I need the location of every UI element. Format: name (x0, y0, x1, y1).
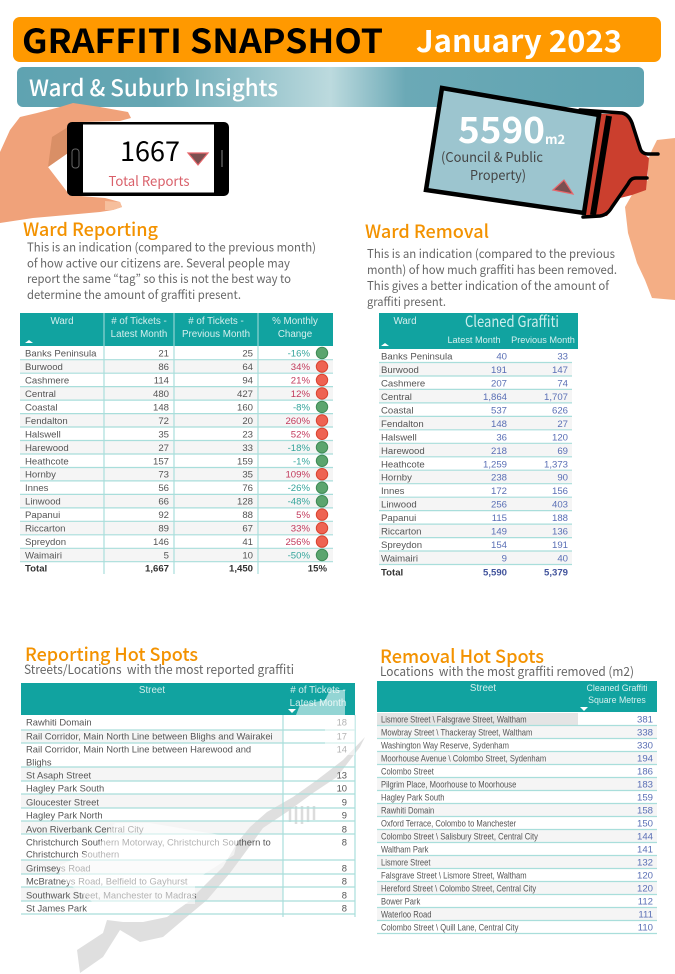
table rows: Central (25, 389, 56, 400)
table rows: Rail Corridor, Main North Line between Blighs and Wairakei (26, 730, 273, 742)
table header: # of Tickets - (111, 316, 167, 327)
icon: down triangle (188, 153, 208, 165)
text: ward reporting description: of how active our citizens are. Several people may (27, 254, 291, 272)
table rows: Burwood (381, 365, 419, 376)
map watermark (77, 737, 365, 973)
total reports value: 1667 (120, 130, 180, 169)
text: ward reporting description: This is an indication (compared to the previous month) (27, 238, 316, 256)
square metre values: 330 (637, 740, 653, 752)
total row (25, 564, 327, 574)
table rows: Waimairi (25, 550, 62, 562)
total reports label: Total Reports (108, 170, 190, 190)
square metre values: 381 (637, 714, 653, 726)
table header (377, 681, 657, 712)
table rows: 172 (491, 486, 507, 497)
table rows: -16% (288, 348, 310, 360)
total row: 5,590 (483, 568, 507, 578)
street names: Rawhiti Domain (381, 805, 434, 816)
table rows: Riccarton (381, 527, 422, 538)
title banner: January 2023 (416, 17, 622, 61)
table rows: Linwood (25, 497, 61, 508)
table rows: Papanui (381, 513, 416, 524)
table rows: 90 (557, 473, 568, 484)
table rows: Fendalton (25, 416, 68, 427)
table rows: 136 (552, 527, 568, 538)
table rows: 128 (237, 497, 253, 508)
table rows: 8 (342, 862, 347, 874)
table rows: 120 (552, 432, 568, 443)
square metre values: 194 (637, 754, 654, 764)
table header: Cleaned Graffiti (465, 310, 559, 332)
table header: Ward (393, 316, 417, 327)
total row: 1,667 (145, 564, 169, 574)
table rows: St Asaph Street (26, 770, 92, 780)
table header (379, 310, 578, 349)
table rows: 1,373 (544, 459, 568, 470)
table rows: Christchurch Southern (26, 848, 119, 860)
table rows: 25 (242, 348, 253, 360)
table rows: 160 (237, 402, 253, 413)
table rows: Coastal (381, 405, 414, 416)
table rows: 33% (291, 524, 310, 535)
table rows: Grimseys Road (26, 862, 91, 874)
removal unit: m2 (545, 129, 565, 148)
table rows: 27 (557, 419, 568, 430)
removal caption: Property) (470, 164, 526, 184)
table rows: 109% (285, 470, 310, 481)
table rows: Burwood (25, 362, 63, 373)
table rows (381, 352, 569, 564)
table rows: 207 (491, 378, 507, 390)
table rows: 114 (154, 376, 170, 386)
table rows: 89 (158, 524, 169, 535)
table rows: 56 (158, 483, 169, 494)
table rows (25, 347, 328, 562)
table rows: 94 (242, 376, 254, 386)
street names: Oxford Terrace, Colombo to Manchester (381, 818, 516, 829)
table rows (26, 716, 347, 914)
table rows: Hagley Park North (26, 810, 103, 820)
heading: Reporting Hot Spots: Reporting Hot Spots (25, 641, 198, 667)
table rows: 154 (491, 540, 508, 551)
icon: hand holding phone with total reports (0, 103, 229, 223)
table rows: 9 (502, 554, 507, 564)
table rows: 8 (342, 890, 347, 900)
square metre values: 186 (637, 766, 653, 778)
table rows: 115 (492, 513, 507, 524)
table rows: 33 (242, 443, 253, 454)
total row: Total (381, 568, 403, 578)
table rows: Cashmere (381, 378, 425, 390)
table rows: 21% (291, 376, 310, 386)
panel: removal hot spots table (377, 681, 657, 934)
table rows: Waimairi (381, 554, 418, 564)
panel: ward removal table (379, 310, 578, 578)
street names: Lismore Street \ Falsgrave Street, Waltham (381, 714, 527, 725)
square metre values: 110 (638, 922, 653, 934)
table rows: -48% (288, 497, 310, 508)
panel: reporting hot spots table (21, 683, 365, 973)
street names: Hagley Park South (381, 792, 445, 803)
table rows: 256 (491, 500, 507, 511)
text: ward removal description (367, 245, 617, 310)
table rows: Avon Riverbank Central City (26, 824, 144, 834)
street names: Waterloo Road (381, 909, 432, 920)
table rows: Harewood (25, 443, 69, 454)
table rows: Gloucester Street (26, 796, 99, 808)
table rows: 188 (552, 513, 568, 524)
street names: Falsgrave Street \ Lismore Street, Waltham (381, 870, 527, 881)
table rows: 9 (342, 810, 347, 820)
table header (21, 683, 355, 715)
removal value: 5590 (458, 102, 545, 154)
table rows: 260% (285, 416, 310, 427)
text: ward reporting description: report the same “tag” so this is not the best way to (27, 270, 291, 287)
table rows: 18 (337, 716, 347, 728)
table rows: 34% (291, 362, 310, 373)
table rows: 52% (291, 429, 310, 440)
table rows: 10 (337, 782, 347, 794)
table rows: 64 (242, 362, 254, 373)
table rows: 66 (158, 497, 169, 508)
table rows: Rail Corridor, Main North Line between Harewood and (26, 744, 251, 754)
table rows: 20 (242, 416, 253, 427)
table header: Change (278, 329, 313, 340)
table rows: Cashmere (25, 376, 69, 386)
table rows: Papanui (25, 510, 60, 521)
square metre values: 158 (637, 806, 653, 816)
square metre values: 120 (637, 884, 653, 894)
table rows: -26% (288, 483, 310, 494)
table rows: 147 (552, 365, 568, 376)
table rows: Hagley Park South (26, 782, 104, 794)
table rows: 427 (237, 389, 253, 400)
table rows: 8 (342, 836, 347, 848)
table rows: -50% (288, 550, 310, 562)
table rows: Rawhiti Domain (26, 716, 92, 728)
text: ward removal description: graffiti present. (367, 293, 446, 310)
table rows: 76 (242, 483, 253, 494)
text: removal hot spots subtitle: Locations with the most graffiti removed (m2) (380, 661, 634, 680)
table rows: 23 (242, 429, 253, 440)
table rows: Linwood (381, 500, 417, 511)
table rows: 146 (153, 537, 169, 548)
text: ward removal description: month) of how much graffiti has been removed. (367, 261, 617, 278)
street names: Moorhouse Avenue \ Colombo Street, Sydenham (381, 753, 546, 764)
table rows: 8 (342, 876, 347, 886)
table header: Cleaned Graffiti (587, 683, 648, 693)
table rows: 21 (158, 348, 169, 360)
square metre values: 120 (637, 870, 653, 882)
square metre values: 141 (637, 844, 653, 856)
table header: Street (139, 685, 165, 696)
table rows: 1,864 (483, 392, 508, 403)
street names: Colombo Street \ Salisbury Street, Central City (381, 831, 539, 842)
table rows: 40 (557, 554, 568, 564)
text: reporting hot spots subtitle: Streets/Locations with the most reported graffiti (24, 659, 294, 678)
street names: Mowbray Street \ Thackeray Street, Waltham (381, 727, 532, 738)
table rows: 5 (164, 550, 169, 562)
table rows: 36 (496, 432, 507, 443)
table header: # of Tickets - (290, 685, 346, 696)
square metre values: 132 (637, 858, 653, 868)
square metre values: 159 (637, 792, 653, 804)
table rows: Christchurch Southern Motorway, Christchurch Southern to (26, 836, 271, 848)
table rows: 33 (557, 352, 568, 362)
heading: Removal Hot Spots: Removal Hot Spots (380, 643, 544, 669)
table rows: 86 (158, 362, 169, 373)
square metre values: 150 (637, 818, 653, 830)
table rows: Southwark Street, Manchester to Madras (26, 890, 197, 900)
table rows: 69 (557, 446, 568, 457)
table header (20, 313, 333, 346)
icon: hand holding paint brush with removal total (426, 88, 675, 300)
table rows: Spreydon (25, 537, 66, 548)
street names (381, 714, 546, 933)
table rows: 67 (242, 524, 253, 535)
title banner: GRAFFITI SNAPSHOT (22, 15, 383, 63)
panel: ward reporting table (20, 313, 333, 574)
section banner: Ward and Suburb Insights (17, 67, 644, 107)
table rows: St James Park (26, 902, 87, 914)
table rows: 480 (153, 389, 169, 400)
table header: Previous Month (511, 335, 575, 345)
table rows: 157 (153, 456, 169, 467)
table rows: 35 (242, 470, 253, 481)
heading: Ward Reporting: Ward Reporting (23, 216, 159, 242)
square metre values: 144 (637, 832, 654, 842)
table rows: Hornby (25, 470, 56, 481)
street names: Pilgrim Place, Moorhouse to Moorhouse (381, 779, 517, 790)
table rows: Heathcote (25, 456, 69, 467)
table header: # of Tickets - (188, 316, 244, 327)
table rows: McBratneys Road, Belfield to Gayhurst (26, 876, 188, 886)
square metre values: 112 (638, 896, 653, 908)
table rows: 156 (552, 486, 568, 497)
table rows: Hornby (381, 473, 412, 484)
table rows: Innes (381, 486, 405, 497)
table rows: 73 (158, 470, 169, 481)
street names: Colombo Street \ Quill Lane, Central City (381, 922, 519, 933)
total row: 1,450 (229, 564, 253, 574)
removal caption (441, 146, 543, 184)
table rows: Halswell (25, 429, 61, 440)
table rows: 17 (337, 730, 347, 742)
table rows: 92 (158, 510, 169, 521)
total row: 5,379 (544, 568, 568, 578)
table rows: 238 (491, 473, 507, 484)
table rows: 1,259 (483, 459, 507, 470)
table rows: 159 (237, 456, 253, 467)
table rows: 148 (491, 419, 507, 430)
table rows: 8 (342, 824, 347, 834)
heading: Ward Removal: Ward Removal (365, 218, 489, 244)
map watermark detail (290, 806, 314, 824)
table rows: 149 (491, 527, 507, 538)
table rows: Coastal (25, 402, 58, 413)
table rows: Fendalton (381, 419, 424, 430)
table header: Latest Month (290, 698, 346, 709)
street names: Washington Way Reserve, Sydenham (381, 740, 509, 751)
total row: 15% (308, 564, 327, 574)
table header: Square Metres (588, 695, 646, 705)
total row: Total (25, 564, 47, 574)
square metre values: 183 (637, 780, 653, 790)
table rows: 10 (242, 550, 253, 562)
table rows: 40 (496, 352, 507, 362)
table rows: 41 (242, 537, 253, 548)
table rows: Harewood (381, 446, 425, 457)
table rows: 256% (285, 537, 310, 548)
table rows: Banks Peninsula (25, 348, 97, 360)
table rows: 27 (158, 443, 169, 454)
table rows: 72 (158, 416, 169, 427)
table rows: -8% (293, 402, 310, 413)
table rows: 9 (342, 796, 347, 808)
text: ward reporting description: determine the amount of graffiti present. (27, 286, 241, 303)
table rows: 8 (342, 902, 347, 914)
icon: up triangle (553, 180, 573, 194)
table header: % Monthly (272, 316, 318, 327)
street names: Hereford Street \ Colombo Street, Central City (381, 883, 537, 894)
title banner (13, 15, 661, 63)
table rows: 74 (557, 378, 569, 390)
total row (381, 568, 568, 578)
square metre values: 338 (637, 728, 653, 738)
table header: Latest Month (111, 329, 167, 340)
table rows: 148 (153, 402, 169, 413)
street names: Bower Park (381, 896, 421, 907)
table rows: 191 (552, 540, 568, 551)
table rows: 1,707 (544, 392, 568, 403)
table rows: 403 (552, 500, 568, 511)
text: ward removal description: This is an indication (compared to the previous (367, 245, 615, 262)
table rows: 88 (242, 510, 253, 521)
table rows: -18% (288, 443, 310, 454)
street names: Lismore Street (381, 857, 431, 868)
table rows: Halswell (381, 432, 417, 443)
table rows: 14 (337, 744, 347, 754)
square metre values: 111 (638, 910, 653, 920)
table rows: -1% (293, 456, 310, 467)
table rows: Heathcote (381, 459, 425, 470)
table header: Street (470, 683, 496, 694)
section banner: Ward and Suburb Insights: Ward & Suburb Insights (29, 71, 278, 103)
table rows: 218 (491, 446, 507, 457)
table rows: 191 (491, 365, 507, 376)
table header: Ward (50, 316, 74, 327)
table rows: Central (381, 392, 412, 403)
table header: Previous Month (182, 329, 250, 340)
table rows: 35 (158, 429, 169, 440)
text: ward removal description: This gives a better indication of the amount of (367, 277, 610, 294)
white map overlay fading the text (60, 690, 355, 904)
text: ward reporting description (27, 238, 316, 303)
table rows: Riccarton (25, 524, 66, 535)
table rows: 12% (291, 389, 310, 400)
table rows: 5% (296, 510, 310, 521)
table rows: 626 (552, 405, 568, 416)
table rows: 537 (491, 405, 507, 416)
removal caption: (Council & Public (441, 146, 543, 166)
table rows: Blighs (26, 756, 52, 768)
table header: Latest Month (447, 335, 501, 345)
table rows: 13 (337, 770, 347, 780)
street names: Waltham Park (381, 844, 429, 855)
table rows: Spreydon (381, 540, 422, 551)
table rows: Innes (25, 483, 49, 494)
square metre values (637, 714, 654, 934)
street names: Colombo Street (381, 766, 434, 777)
table rows: Banks Peninsula (381, 352, 453, 362)
